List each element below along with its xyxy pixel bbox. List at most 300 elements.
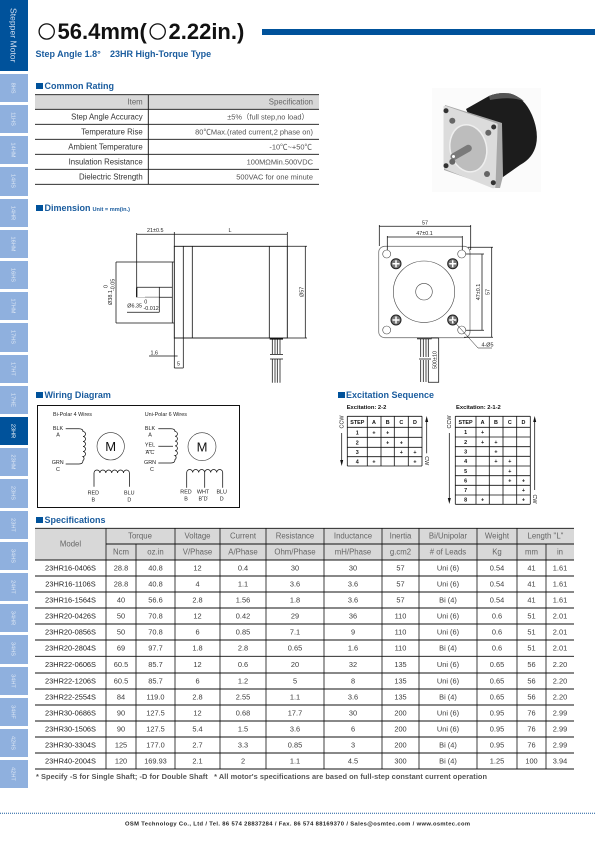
table rows: 125 (115, 741, 127, 750)
bi-polar 4 wires diagram: GRN (52, 460, 64, 466)
uni-polar 6 wires diagram: RED (180, 489, 192, 495)
table header: Model (60, 540, 81, 548)
title: 56.4mm( (58, 19, 147, 44)
uni-polar 6 wires diagram: M (197, 440, 207, 454)
table rows: 56 (527, 677, 536, 686)
drawing: motor front view: 57 (486, 289, 492, 295)
subtitle: 23HR High-Torque Type (110, 49, 211, 59)
table rows: 135 (394, 677, 407, 686)
table rows: 23HR20-2804S (45, 644, 96, 653)
table rows: 60.5 (114, 677, 128, 686)
table rows: 1.61 (553, 580, 567, 589)
table: excitation 2-1-2: + (522, 478, 525, 484)
uni-polar 6 wires diagram: Uni-Polar 6 Wires (145, 412, 187, 418)
table rows: 1.61 (553, 564, 567, 573)
table header (60, 532, 564, 556)
table rows: 110 (395, 644, 406, 653)
bi-polar 4 wires diagram: M (105, 439, 116, 454)
table rows: 85.7 (148, 677, 163, 686)
drawing: motor side view: Ø6.35 (127, 303, 142, 309)
table: specifications (35, 528, 574, 769)
sidebar navigation: 42HT (10, 767, 16, 781)
bi-polar 4 wires diagram: BLU (124, 491, 135, 497)
table rows: 90 (117, 709, 125, 718)
table rows: 0.6 (238, 660, 248, 669)
table header: Inertia (390, 532, 412, 540)
table: common rating: Specification (269, 98, 313, 107)
table: excitation 2-2 (340, 405, 429, 466)
sidebar navigation: 17HM (10, 299, 16, 314)
table rows: 0.95 (490, 741, 504, 750)
table rows: 30 (349, 709, 357, 718)
table: excitation 2-1-2: + (508, 469, 511, 475)
table rows: 0.65 (490, 693, 504, 702)
table header: Length "L" (528, 532, 564, 540)
bi-polar 4 wires diagram: BLK (53, 426, 63, 432)
table rows: 200 (394, 709, 407, 718)
table rows: 127.5 (146, 709, 165, 718)
table: excitation 2-2: + (372, 459, 376, 465)
table: excitation 2-1-2: + (522, 498, 525, 504)
table rows: 41 (527, 564, 536, 573)
table rows: 17.7 (288, 709, 302, 718)
table header: Bi/Unipolar (429, 532, 467, 540)
table rows: 76 (527, 741, 536, 750)
table rows: 41 (527, 580, 536, 589)
drawing: motor side view: -0.012 (144, 306, 159, 312)
table rows: 4.5 (348, 757, 358, 766)
table: excitation 2-1-2: 3 (464, 450, 467, 456)
table rows: 20 (291, 660, 299, 669)
table rows: 51 (527, 612, 536, 621)
table: excitation 2-1-2: 7 (464, 488, 467, 494)
sidebar navigation (0, 0, 28, 788)
table rows: 7.1 (290, 628, 300, 637)
table rows: 57 (396, 564, 405, 573)
table rows: Bi (4) (439, 596, 457, 605)
sidebar navigation: 34HS (10, 549, 16, 563)
drawing: motor side view: 5 (177, 362, 180, 368)
table: common rating: Insulation Resistance (69, 158, 143, 167)
heading: wiring diagram: Wiring Diagram (44, 390, 111, 400)
table rows: 2.01 (553, 612, 567, 621)
table rows: 3.3 (238, 741, 248, 750)
table rows: 3 (351, 741, 355, 750)
table: common rating: 100MΩMin.500VDC (247, 157, 314, 166)
sidebar navigation: 23HR (10, 424, 16, 438)
table: common rating: Temperature Rise (81, 128, 143, 137)
panel: wiring diagram (38, 406, 240, 508)
table: common rating: Step Angle Accuracy (71, 113, 143, 122)
table rows: 0.85 (288, 741, 302, 750)
table rows: 23HR20-0856S (45, 628, 96, 637)
table rows: 127.5 (146, 725, 165, 734)
table rows: Uni (6) (437, 612, 459, 621)
table rows: 97.7 (148, 644, 163, 653)
table: excitation 2-2: + (386, 430, 389, 436)
header bar (262, 29, 595, 35)
table rows: 69 (117, 644, 125, 653)
table: excitation 2-2: A (372, 420, 376, 426)
table: excitation 2-2: B (386, 420, 390, 426)
table rows: 135 (394, 693, 407, 702)
table rows: 135 (394, 660, 407, 669)
sidebar navigation: 34HR (10, 611, 16, 625)
table rows: 3.94 (553, 757, 567, 766)
table: excitation 2-1-2: 4 (464, 459, 467, 465)
sidebar navigation: 17HT (10, 362, 16, 376)
table: common rating: Dielectric Strength (79, 173, 143, 182)
table rows: 40.8 (148, 564, 163, 573)
table: excitation 2-1-2: 2 (464, 440, 467, 446)
footer divider (0, 812, 595, 814)
table rows: 0.68 (236, 709, 250, 718)
sidebar navigation: 34HT (10, 674, 16, 688)
table: excitation 2-1-2: 8 (464, 498, 467, 504)
table rows: 1.1 (290, 757, 300, 766)
uni-polar 6 wires diagram: BLU (216, 489, 227, 495)
table rows: 23HR30-0686S (45, 709, 96, 718)
table rows: 8 (351, 677, 355, 686)
drawing: motor side view (104, 228, 307, 383)
table rows: 12 (193, 612, 202, 621)
sidebar navigation: 14HS (10, 174, 16, 188)
drawing: motor side view: 1.6 (150, 350, 158, 356)
table: excitation 2-2: C (399, 420, 403, 426)
sidebar navigation: Stepper Motor (8, 8, 18, 63)
table: excitation 2-1-2: STEP (459, 420, 473, 426)
sidebar navigation: 24HT (10, 580, 16, 594)
table rows: 50 (117, 628, 125, 637)
table rows: Bi (4) (439, 741, 457, 750)
table rows: 51 (527, 628, 536, 637)
table rows: 3.6 (348, 693, 358, 702)
table: excitation 2-2: 1 (356, 430, 359, 436)
table rows: 40.8 (148, 580, 163, 589)
drawing: motor side view: 0 (104, 285, 110, 288)
sidebar navigation: 34HF (10, 705, 16, 719)
table: excitation 2-1-2: D (522, 420, 526, 426)
table header: mm (525, 548, 538, 556)
drawing: motor side view: 0 (144, 299, 147, 305)
table rows: 40 (117, 596, 125, 605)
drawing: motor side view: Ø57 (300, 287, 306, 297)
table: excitation 2-1-2: CCW (447, 415, 453, 428)
table rows: 4 (195, 580, 200, 589)
uni-polar 6 wires diagram: YEL (145, 443, 155, 449)
table: excitation 2-1-2: + (494, 459, 498, 465)
table rows: Bi (4) (439, 644, 457, 653)
table rows: 76 (527, 709, 536, 718)
table: excitation 2-1-2: 1 (464, 430, 467, 436)
table rows: 6 (195, 628, 200, 637)
bi-polar 4 wires diagram: C (56, 467, 60, 473)
table header: mH/Phase (335, 548, 371, 556)
table: excitation 2-2: 4 (356, 459, 359, 465)
table: excitation 2-1-2: 6 (464, 478, 467, 484)
table rows: Uni (6) (437, 564, 459, 573)
bi-polar 4 wires diagram (52, 412, 135, 504)
table rows: 2.99 (553, 741, 567, 750)
table rows: Bi (4) (439, 757, 457, 766)
table: excitation 2-2: CCW (340, 415, 346, 428)
table rows: Uni (6) (437, 677, 459, 686)
footnote: * Specify -S for Single Shaft; -D for Double Shaft * All motor's specifications are based on full-step constant current operation (36, 772, 487, 781)
table rows: 0.85 (236, 628, 250, 637)
sidebar navigation: 14HM (10, 143, 16, 158)
uni-polar 6 wires diagram: D (220, 496, 224, 502)
table: common rating: 500VAC for one minute (236, 172, 313, 181)
table rows: 2.20 (553, 693, 567, 702)
table rows: 23HR22-0606S (45, 660, 96, 669)
sidebar navigation: 23HT (10, 518, 16, 532)
table rows: 1.8 (290, 596, 300, 605)
table rows: 100 (525, 757, 538, 766)
table rows: 9 (351, 628, 355, 637)
table rows: 23HR22-1206S (45, 677, 96, 686)
table rows: 50 (117, 612, 125, 621)
sidebar navigation: 23HS (10, 486, 16, 500)
sidebar navigation: 14HR (10, 206, 16, 220)
table rows: 1.1 (290, 693, 300, 702)
table rows: 30 (349, 564, 357, 573)
table rows: 23HR16-0406S (45, 564, 96, 573)
bi-polar 4 wires diagram: RED (88, 491, 99, 497)
table rows: 23HR22-2554S (45, 693, 96, 702)
table rows: 0.65 (288, 644, 302, 653)
subtitle: Step Angle 1.8° (36, 49, 101, 59)
table: excitation 2-2: + (400, 450, 403, 456)
table rows: 0.6 (492, 628, 502, 637)
drawing: motor front view (379, 220, 493, 383)
table rows: 2.01 (553, 628, 567, 637)
table header: V/Phase (183, 548, 212, 556)
table rows: Uni (6) (437, 725, 459, 734)
table rows: 1.61 (553, 596, 567, 605)
table rows: 0.95 (490, 725, 504, 734)
table rows: 0.4 (238, 564, 248, 573)
table rows: 1.2 (238, 677, 248, 686)
table rows: Bi (4) (439, 693, 457, 702)
drawing: motor front view: 47±0.1 (476, 284, 482, 300)
table header: oz.in (147, 548, 164, 556)
footer contact line: OSM Technology Co., Ltd / Tel. 86 574 28837284 / Fax. 86 574 88169370 / Sales@osmtec.com / www.osmtec.com (125, 822, 470, 828)
table header: g.cm2 (390, 548, 411, 556)
drawing: motor front view: 4-Ø5 (482, 342, 493, 348)
table rows: 2.99 (553, 709, 567, 718)
table rows: 3.6 (290, 725, 300, 734)
table rows: 2.8 (238, 644, 248, 653)
table header: Inductance (334, 532, 372, 540)
table rows: 177.0 (146, 741, 165, 750)
uni-polar 6 wires diagram: A C (146, 450, 154, 456)
table: excitation 2-1-2: 5 (464, 469, 467, 475)
table rows: 0.65 (490, 660, 504, 669)
table: common rating (35, 95, 319, 184)
table rows: 2 (241, 757, 245, 766)
table rows: 200 (394, 725, 407, 734)
table rows: 2.1 (192, 757, 203, 766)
table rows: 36 (349, 612, 357, 621)
uni-polar 6 wires diagram: GRN (144, 460, 156, 466)
sidebar navigation: 17HS (10, 330, 16, 344)
title (39, 19, 244, 44)
table rows: 90 (117, 725, 125, 734)
heading: excitation sequence: Excitation Sequence (346, 390, 434, 400)
table rows: 0.54 (490, 564, 504, 573)
drawing: motor side view: -0.05 (110, 279, 116, 291)
table: excitation 2-2: + (400, 440, 403, 446)
table: common rating: -10℃~+50℃ (269, 142, 313, 151)
table rows: 12 (193, 709, 202, 718)
table rows: 57 (396, 596, 405, 605)
table: excitation 2-2: + (413, 450, 417, 456)
drawing: motor front view: 57 (422, 220, 428, 226)
table rows: 1.6 (348, 644, 358, 653)
table header: Torque (128, 532, 152, 540)
table: excitation 2-2: + (386, 440, 389, 446)
table: excitation 2-1-2: A (481, 420, 485, 426)
table rows: 1.8 (192, 644, 203, 653)
table: common rating: 80℃Max.(rated current,2 phase on) (195, 127, 314, 136)
heading: dimension: Dimension (44, 203, 91, 213)
table header: Resistance (276, 532, 314, 540)
table: excitation 2-2: STEP (350, 420, 365, 426)
table rows: 3.6 (348, 596, 358, 605)
table rows: 2.8 (192, 596, 203, 605)
heading: specifications: Specifications (44, 515, 106, 525)
table: excitation 2-2: + (372, 430, 376, 436)
table: common rating: Ambient Temperature (68, 143, 143, 152)
table rows: 0.54 (490, 580, 504, 589)
table rows: 2.20 (553, 677, 567, 686)
product photo: stepper motor (432, 88, 541, 192)
heading: dimension (36, 203, 130, 213)
table rows: Uni (6) (437, 580, 459, 589)
table: excitation 2-1-2: + (481, 440, 484, 446)
sidebar navigation: 11HS (10, 112, 16, 126)
sidebar navigation: 17HE (10, 393, 16, 407)
table rows: 28.8 (114, 580, 128, 589)
table header: Weight (485, 532, 510, 540)
title: 2.22in.) (168, 19, 244, 44)
table rows: 0.6 (492, 644, 502, 653)
table rows: 23HR30-1506S (45, 725, 96, 734)
table: excitation 2-1-2: + (508, 478, 511, 484)
bi-polar 4 wires diagram: A (56, 432, 60, 438)
table header: Current (230, 532, 257, 540)
table: excitation 2-2: D (413, 420, 417, 426)
table: excitation 2-1-2: + (481, 430, 484, 436)
table: excitation 2-1-2: + (481, 498, 484, 504)
table rows: 30 (291, 564, 299, 573)
table rows: 2.99 (553, 725, 567, 734)
table rows: 119.0 (147, 693, 164, 702)
heading: dimension: Unit = mm(in.) (92, 207, 130, 213)
table rows: 23HR30-3304S (45, 741, 96, 750)
table rows: 2.8 (192, 693, 203, 702)
table header: Ohm/Phase (274, 548, 316, 556)
table header: A/Phase (228, 548, 258, 556)
table rows: 60.5 (114, 660, 128, 669)
drawing: motor side view: Ø38.1 (108, 290, 114, 305)
table: excitation 2-1-2 (447, 405, 537, 504)
table: excitation 2-1-2: + (508, 459, 511, 465)
table rows: 5.4 (192, 725, 203, 734)
table rows: 200 (394, 741, 407, 750)
table rows: 12 (193, 564, 202, 573)
drawing: motor front view: 500±10 (432, 351, 438, 369)
table rows: 2.01 (553, 644, 567, 653)
table header: Kg (492, 548, 502, 556)
table rows: 41 (527, 596, 536, 605)
table rows: 51 (527, 644, 536, 653)
table rows: 28.8 (114, 564, 128, 573)
uni-polar 6 wires diagram: B (184, 496, 188, 502)
table: excitation 2-2: 3 (356, 450, 359, 456)
sidebar navigation: 16HM (10, 237, 16, 252)
table header: Ncm (113, 548, 129, 556)
table rows: 1.1 (238, 580, 248, 589)
table rows: 300 (394, 757, 407, 766)
table rows: 29 (291, 612, 299, 621)
table rows: 6 (351, 725, 355, 734)
table header: in (557, 548, 563, 556)
table rows: 70.8 (148, 612, 163, 621)
table rows: 1.5 (238, 725, 248, 734)
table rows: Uni (6) (437, 660, 459, 669)
uni-polar 6 wires diagram: WHT (197, 489, 210, 495)
table: excitation 2-2: + (413, 459, 417, 465)
table rows: 0.95 (490, 709, 504, 718)
bi-polar 4 wires diagram: D (127, 498, 131, 504)
table rows: 169.93 (144, 757, 167, 766)
table: excitation 2-1-2: B (494, 420, 498, 426)
uni-polar 6 wires diagram (144, 412, 227, 502)
table rows: 23HR16-1564S (45, 596, 96, 605)
table header: # of Leads (430, 548, 466, 556)
uni-polar 6 wires diagram: BLK (145, 426, 155, 432)
bi-polar 4 wires diagram: Bi-Polar 4 Wires (53, 412, 92, 418)
table: excitation 2-1-2: + (522, 488, 525, 494)
table rows: 70.8 (148, 628, 163, 637)
uni-polar 6 wires diagram: C (150, 467, 154, 473)
table rows: 2.7 (192, 741, 203, 750)
table rows: 32 (349, 660, 357, 669)
table: excitation 2-1-2: CW (531, 495, 537, 504)
table rows: 23HR40-2004S (45, 757, 96, 766)
table rows: 23HR16-1106S (45, 580, 96, 589)
sidebar navigation: 16HS (10, 268, 16, 282)
sidebar navigation: 23HM (10, 455, 16, 470)
table: common rating: ±5%（full step,no load） (227, 112, 309, 121)
table rows: 0.65 (490, 677, 504, 686)
table rows (45, 564, 567, 766)
table rows: 84 (117, 693, 125, 702)
table rows: 56 (527, 693, 536, 702)
table rows: 6 (195, 677, 200, 686)
heading: common rating: Common Rating (44, 81, 114, 91)
table rows: 1.25 (490, 757, 504, 766)
table rows: 85.7 (148, 660, 163, 669)
table rows: 0.6 (492, 612, 502, 621)
table: excitation 2-1-2: Excitation: 2-1-2 (456, 405, 501, 411)
table rows: 56 (527, 660, 536, 669)
table: excitation 2-2: 2 (356, 440, 359, 446)
drawing: motor front view: 47±0.1 (416, 231, 433, 237)
bi-polar 4 wires diagram: B (91, 498, 95, 504)
table rows: Uni (6) (437, 628, 459, 637)
